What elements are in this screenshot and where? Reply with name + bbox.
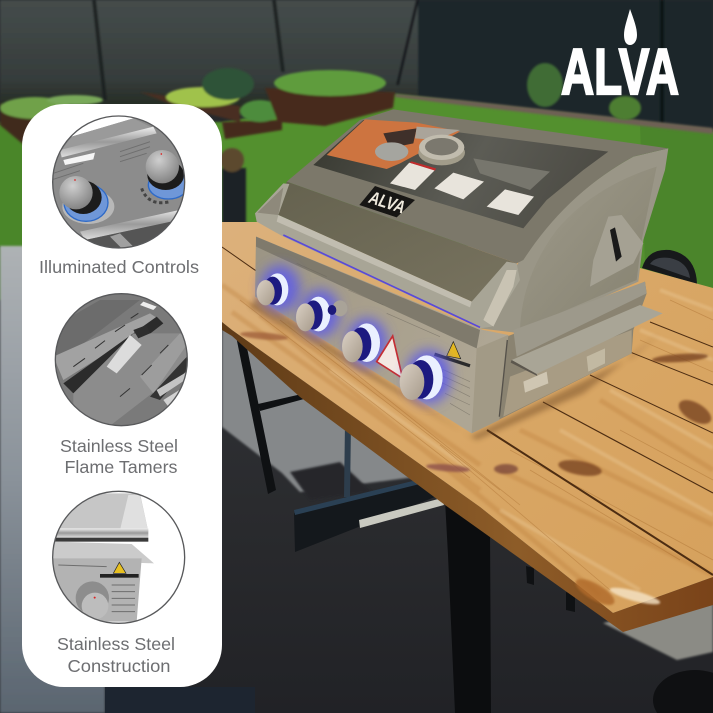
label: construction	[57, 634, 175, 676]
hood top frame	[287, 109, 668, 263]
glass window	[313, 120, 608, 228]
knob 4 with glow	[400, 350, 451, 403]
lawn	[0, 94, 713, 300]
ALVA badge: ALVA	[366, 187, 408, 217]
label: flame tamers: Flame Tamers	[64, 457, 178, 477]
circle 3: construction	[50, 488, 190, 628]
left knob	[62, 194, 114, 224]
panel: features card	[22, 104, 222, 687]
label: flame tamers	[60, 436, 178, 477]
hood front panel	[278, 182, 517, 302]
grill shadow	[250, 297, 660, 440]
igniter button	[328, 300, 347, 316]
light patio wedge	[222, 322, 415, 492]
white labels	[390, 163, 534, 215]
patio tiles	[0, 246, 105, 713]
table top	[222, 222, 713, 632]
blue light strip	[283, 235, 480, 327]
wood knots	[240, 330, 713, 610]
hood side	[480, 148, 668, 333]
fine print on control panel	[297, 263, 470, 415]
handle	[255, 183, 520, 328]
label: construction: Construction	[68, 656, 170, 676]
dark floor	[105, 300, 713, 713]
circle 2: flame tamers	[53, 292, 190, 428]
grill	[250, 109, 668, 440]
label: construction: Stainless Steel	[57, 634, 175, 654]
circle 1: illuminated controls	[50, 113, 190, 253]
label: flame tamers: Stainless Steel	[60, 436, 178, 456]
label: illuminated controls: Illuminated Controls	[39, 257, 199, 277]
knob 2 with glow	[296, 289, 340, 337]
orange label	[327, 119, 460, 169]
plank seams	[222, 247, 713, 575]
base front face	[255, 237, 508, 433]
knob 3 with glow	[342, 318, 387, 367]
light patch bottom right	[603, 600, 713, 660]
logo	[561, 9, 679, 108]
lower body side	[498, 282, 647, 420]
right knob	[148, 176, 184, 200]
yellow warning icon	[447, 342, 461, 359]
knob 1 with glow	[257, 265, 300, 312]
wood grain	[222, 247, 713, 595]
mounting flap	[513, 282, 647, 357]
table legs and beam	[236, 336, 713, 713]
warning triangle	[377, 336, 403, 378]
fence	[0, 0, 713, 128]
chair behind table	[642, 250, 697, 284]
flame	[624, 9, 637, 45]
thermometer	[418, 135, 465, 165]
garden beds	[0, 63, 641, 226]
